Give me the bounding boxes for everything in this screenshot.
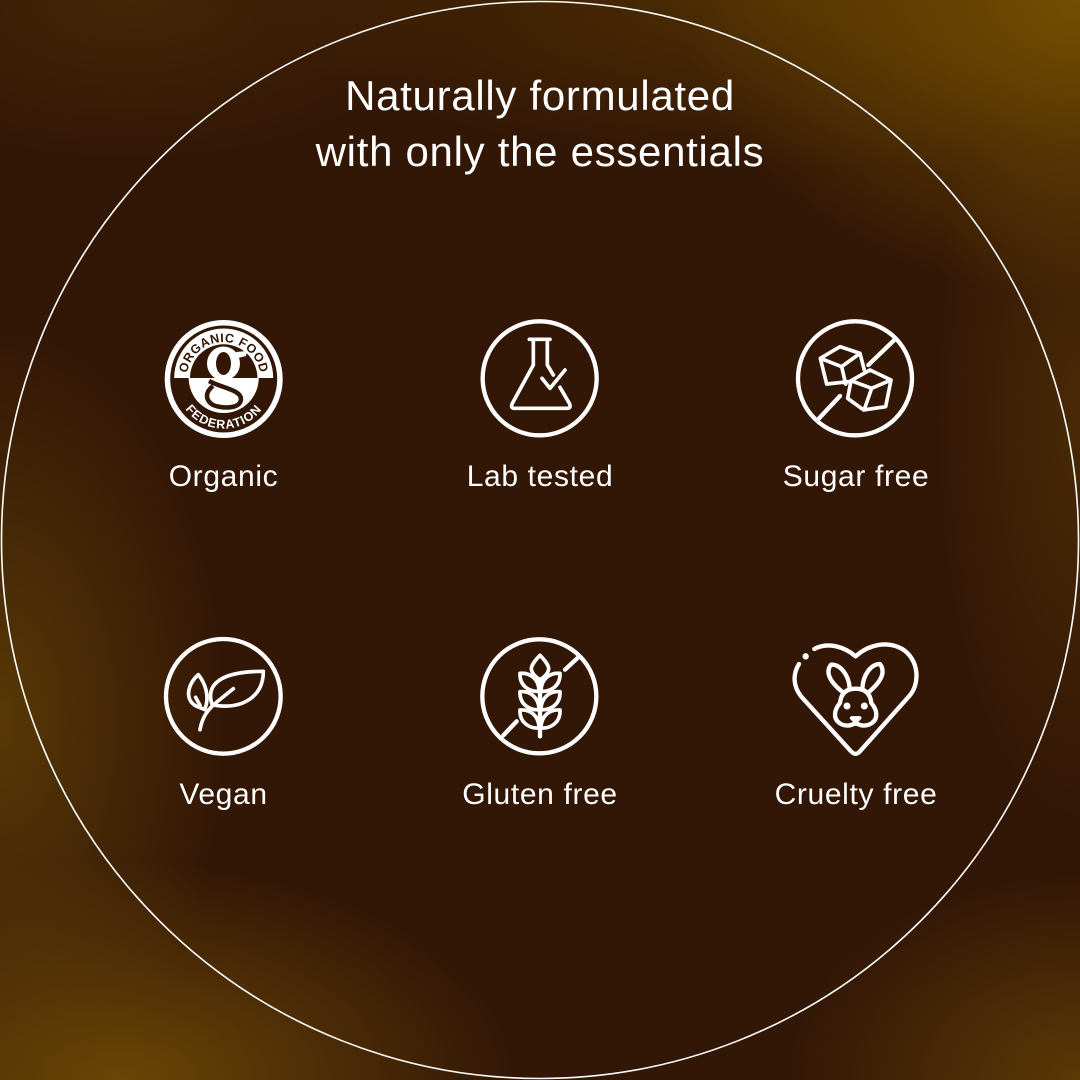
icon: Organic Food Federation logo: ORGANIC FOOD	[180, 334, 268, 372]
label: Organic: Organic	[169, 460, 278, 493]
title: with only the essentials	[316, 128, 764, 175]
label: Gluten free: Gluten free	[462, 778, 618, 811]
icon: lab flask with check	[483, 321, 597, 435]
icon: Organic Food Federation logo	[164, 320, 283, 438]
label: Cruelty free: Cruelty free	[775, 778, 937, 811]
label: Sugar free: Sugar free	[783, 460, 929, 493]
icon: sugar cubes crossed out	[798, 321, 912, 435]
icon: rabbit in heart	[795, 644, 917, 754]
icon: vegan leaves	[166, 639, 281, 754]
label: Lab tested: Lab tested	[467, 460, 613, 493]
icon: wheat crossed out	[482, 639, 596, 753]
icon: Organic Food Federation logo: FEDERATION	[186, 404, 261, 429]
title: Naturally formulated	[345, 72, 735, 119]
label: Vegan: Vegan	[179, 778, 268, 811]
title	[316, 72, 764, 175]
